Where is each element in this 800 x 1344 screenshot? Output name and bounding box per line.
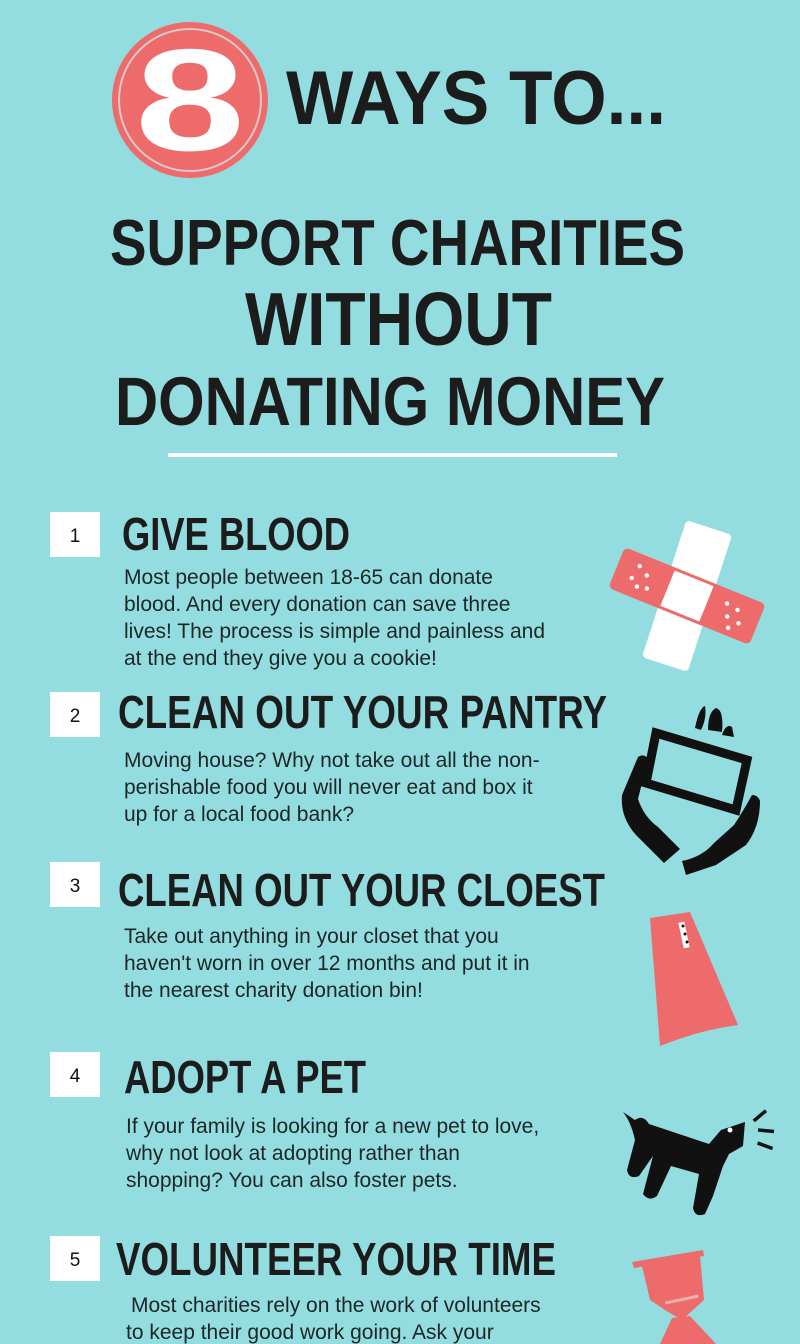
item 1: give blood: 1 bbox=[70, 526, 80, 547]
item 5: volunteer your time: 5 bbox=[70, 1250, 80, 1271]
item 3: clean out your closet: the nearest charity donation bin! bbox=[124, 979, 423, 1002]
item 2: clean out your pantry: up for a local food bank? bbox=[124, 803, 354, 826]
icon: barking dog bbox=[623, 1109, 774, 1215]
item 4: adopt a pet: why not look at adopting rather than bbox=[125, 1142, 460, 1165]
item 4: adopt a pet: ADOPT A PET bbox=[124, 1051, 366, 1103]
item 1: give blood: lives! The process is simple and painless and bbox=[124, 620, 545, 643]
icon: bandage bbox=[608, 520, 766, 672]
item 5: volunteer your time: VOLUNTEER YOUR TIME bbox=[116, 1233, 556, 1285]
item 4: adopt a pet: 4 bbox=[70, 1066, 81, 1087]
icon: hands holding food box bbox=[622, 706, 760, 875]
item 2: clean out your pantry: Moving house? Why not take out all the non- bbox=[124, 749, 540, 772]
item 4: adopt a pet: If your family is looking for a new pet to love, bbox=[126, 1115, 539, 1138]
item 2: clean out your pantry: CLEAN OUT YOUR PANTRY bbox=[118, 686, 607, 738]
item 2: clean out your pantry bbox=[50, 686, 607, 826]
title: without: WITHOUT bbox=[245, 277, 552, 361]
item 2: clean out your pantry: 2 bbox=[70, 706, 80, 727]
badge: number 8 bbox=[112, 19, 268, 181]
item 3: clean out your closet: CLEAN OUT YOUR CLOEST bbox=[118, 864, 605, 916]
item 3: clean out your closet: haven't worn in over 12 months and put it in bbox=[124, 952, 530, 975]
item 1: give blood: at the end they give you a cookie! bbox=[124, 647, 437, 670]
item 5: volunteer your time: Most charities rely on the work of volunteers bbox=[131, 1294, 541, 1317]
item 4: adopt a pet bbox=[50, 1051, 539, 1192]
item 5: volunteer your time: to keep their good work going. Ask your bbox=[126, 1321, 494, 1344]
item 1: give blood: GIVE BLOOD bbox=[122, 508, 350, 560]
item 1: give blood: blood. And every donation can save three bbox=[124, 593, 510, 616]
icon: skirt bbox=[650, 912, 738, 1046]
item 5: volunteer your time bbox=[50, 1233, 556, 1344]
item 3: clean out your closet bbox=[50, 862, 605, 1002]
title: support charities: SUPPORT CHARITIES bbox=[110, 206, 685, 279]
icon: hourglass bbox=[632, 1250, 716, 1344]
title: ways to: WAYS TO... bbox=[286, 56, 666, 141]
item 2: clean out your pantry: perishable food you will never eat and box it bbox=[124, 776, 533, 799]
badge: number 8: 8 bbox=[135, 19, 245, 181]
title: donating money: DONATING MONEY bbox=[115, 363, 665, 440]
item 4: adopt a pet: shopping? You can also foster pets. bbox=[126, 1169, 458, 1192]
item 3: clean out your closet: Take out anything in your closet that you bbox=[124, 925, 499, 948]
item 1: give blood: Most people between 18-65 can donate bbox=[124, 566, 493, 589]
item 3: clean out your closet: 3 bbox=[70, 876, 80, 897]
item 1: give blood bbox=[50, 508, 545, 670]
